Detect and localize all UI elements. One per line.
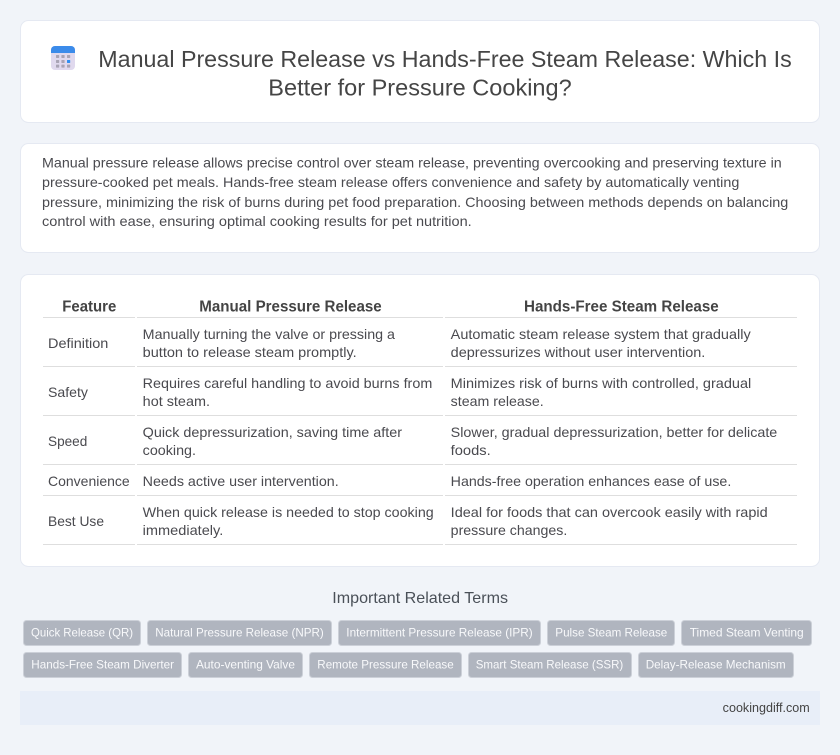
row: speed: cooking. [143,442,196,458]
tag labels: Auto-venting Valve [196,657,295,671]
panel: comparison table [20,274,820,566]
title: Better for Pressure Cooking? [268,74,572,100]
row: safety [48,375,751,409]
table header row: Hands-Free Steam Release [524,298,719,315]
row: best use: immediately. [143,522,223,538]
table header row: Feature [62,298,117,315]
tag labels: Timed Steam Venting [690,625,804,639]
row: best use: Best Use [48,513,104,529]
table header row: Manual Pressure Release [199,298,382,315]
row: convenience: Needs active user intervention. [143,473,339,489]
row: convenience [48,473,731,489]
row: definition: Manually turning the valve or pressing a [143,326,395,342]
row: speed: foods. [451,442,491,458]
row: best use: Ideal for foods that can overcook easily with rapid [451,504,768,520]
intro text block: pressure, minimizing the risk of burns during pet food preparation. Choosing between methods depends on balancing [42,194,788,210]
row: definition: button to release steam promptly. [143,344,357,360]
row: speed [48,424,778,458]
row: safety: Requires careful handling to avoid burns from [143,375,432,391]
intro text block: Manual pressure release allows precise control over steam release, preventing overcooking and preserving texture in [42,154,782,170]
row: safety: steam release. [451,393,544,409]
row: definition: Automatic steam release system that gradually [451,326,751,342]
row: safety: Safety [48,384,88,400]
footer bar [20,691,820,725]
panel: header [20,20,820,122]
tag labels: Natural Pressure Release (NPR) [155,625,324,639]
panel: introduction [20,144,820,252]
row: best use [48,504,768,538]
title [98,46,792,100]
tag labels: Hands-Free Steam Diverter [31,657,174,671]
row: definition: Definition [48,335,108,351]
tag labels: Smart Steam Release (SSR) [476,657,623,671]
row: best use: When quick release is needed to stop cooking [143,504,434,520]
row: convenience: Convenience [48,473,130,489]
tag labels: Remote Pressure Release [317,657,454,671]
row: definition: depressurizes without user intervention. [451,344,705,360]
row: convenience: Hands-free operation enhances ease of use. [451,473,731,489]
heading: important related terms: Important Related Terms [332,590,508,607]
row: definition [48,326,751,360]
intro text block [42,154,788,229]
tag labels [31,625,804,671]
row: best use: pressure changes. [451,522,567,538]
row: speed: Slower, gradual depressurization, better for delicate [451,424,778,440]
row: speed: Quick depressurization, saving time after [143,424,402,440]
title: Manual Pressure Release vs Hands-Free Steam Release: Which Is [98,46,792,72]
row: speed: Speed [48,433,87,449]
tag labels: Pulse Steam Release [555,625,668,639]
tag labels: Quick Release (QR) [31,625,133,639]
intro text block: control with ease, ensuring optimal cooking results for pet nutrition. [42,213,472,229]
row: safety: Minimizes risk of burns with controlled, gradual [451,375,751,391]
intro text block: pressure-cooked pet meals. Hands-free steam release offers convenience and safety by automatically venting [42,174,739,190]
footer source text: cookingdiff.com [723,701,810,715]
row: safety: hot steam. [143,393,210,409]
tag labels: Intermittent Pressure Release (IPR) [346,625,533,639]
icon: calendar grid [51,46,75,70]
panel: related term tags [24,620,812,678]
table header row [62,298,719,315]
tag labels: Delay-Release Mechanism [646,657,786,671]
